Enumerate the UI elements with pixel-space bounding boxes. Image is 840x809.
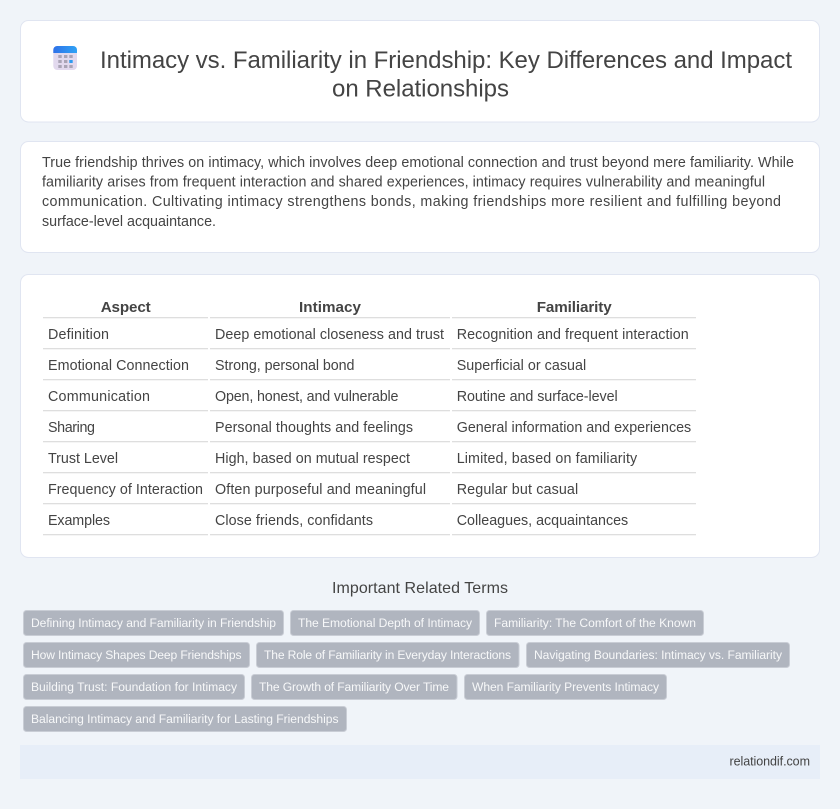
- row: trust level: [48, 451, 638, 467]
- row: definition: Deep emotional closeness and trust: [215, 327, 444, 343]
- footer: [20, 745, 820, 779]
- related terms tags: How Intimacy Shapes Deep Friendships: [31, 648, 242, 662]
- intro paragraph: familiarity arises from frequent interaction and shared experiences, intimacy requires vulnerability and meaningful: [42, 175, 765, 191]
- row: frequency of interaction: Regular but casual: [457, 482, 578, 498]
- table header: Aspect: [101, 299, 151, 316]
- related terms tags: The Growth of Familiarity Over Time: [259, 680, 449, 694]
- row: definition: Recognition and frequent interaction: [457, 327, 689, 343]
- related terms tags: Navigating Boundaries: Intimacy vs. Familiarity: [534, 648, 783, 662]
- related terms tags: Balancing Intimacy and Familiarity for Lasting Friendships: [31, 712, 338, 726]
- row: examples: [48, 513, 628, 529]
- row: examples: Examples: [48, 513, 110, 529]
- related terms tags: [24, 610, 790, 732]
- intro paragraph: communication. Cultivating intimacy strengthens bonds, making friendships more resilient and fulfilling beyond: [42, 194, 781, 210]
- title: on Relationships: [332, 76, 509, 102]
- panel: intro text: [20, 142, 820, 252]
- related terms tags: The Role of Familiarity in Everyday Interactions: [264, 648, 511, 662]
- row: emotional connection: Emotional Connection: [48, 358, 189, 374]
- related terms tags: Familiarity: The Comfort of the Known: [494, 616, 696, 630]
- row: communication: Open, honest, and vulnerable: [215, 389, 399, 405]
- row: emotional connection: [48, 358, 586, 374]
- row: definition: Definition: [48, 327, 109, 343]
- related terms tags: Defining Intimacy and Familiarity in Friendship: [31, 616, 276, 630]
- related terms tags: Building Trust: Foundation for Intimacy: [31, 680, 238, 694]
- row: frequency of interaction: Often purposeful and meaningful: [215, 482, 426, 498]
- row: communication: Communication: [48, 389, 150, 405]
- row: trust level: Trust Level: [48, 451, 118, 467]
- icon: calendar: [53, 46, 77, 70]
- row: trust level: High, based on mutual respect: [215, 451, 410, 467]
- intro paragraph: [42, 155, 794, 230]
- table header: Familiarity: [537, 299, 612, 316]
- row: communication: [48, 389, 618, 405]
- heading: related terms: Important Related Terms: [332, 580, 508, 597]
- title: [100, 47, 792, 102]
- panel: comparison table: [20, 274, 820, 558]
- panel: title header: [20, 20, 820, 122]
- intro paragraph: surface-level acquaintance.: [42, 214, 216, 230]
- row: sharing: Personal thoughts and feelings: [215, 420, 413, 436]
- table header: [101, 299, 612, 316]
- row: examples: Close friends, confidants: [215, 513, 373, 529]
- table header: Intimacy: [299, 299, 362, 316]
- row: sharing: Sharing: [48, 420, 95, 436]
- related terms tags: The Emotional Depth of Intimacy: [298, 616, 473, 630]
- row: emotional connection: Strong, personal bond: [215, 358, 355, 374]
- row: frequency of interaction: Frequency of Interaction: [48, 482, 203, 498]
- row: examples: Colleagues, acquaintances: [457, 513, 628, 529]
- row: trust level: Limited, based on familiarity: [457, 451, 638, 467]
- row: frequency of interaction: [48, 482, 578, 498]
- intro paragraph: True friendship thrives on intimacy, which involves deep emotional connection and trust beyond mere familiarity. While: [42, 155, 794, 171]
- row: communication: Routine and surface-level: [457, 389, 618, 405]
- row: sharing: [48, 420, 691, 436]
- footer: relationdif.com: [730, 755, 810, 769]
- row: definition: [48, 327, 689, 343]
- title: Intimacy vs. Familiarity in Friendship: Key Differences and Impact: [100, 47, 792, 74]
- row: emotional connection: Superficial or casual: [457, 358, 586, 374]
- related terms tags: When Familiarity Prevents Intimacy: [472, 680, 660, 694]
- row: sharing: General information and experiences: [457, 420, 691, 436]
